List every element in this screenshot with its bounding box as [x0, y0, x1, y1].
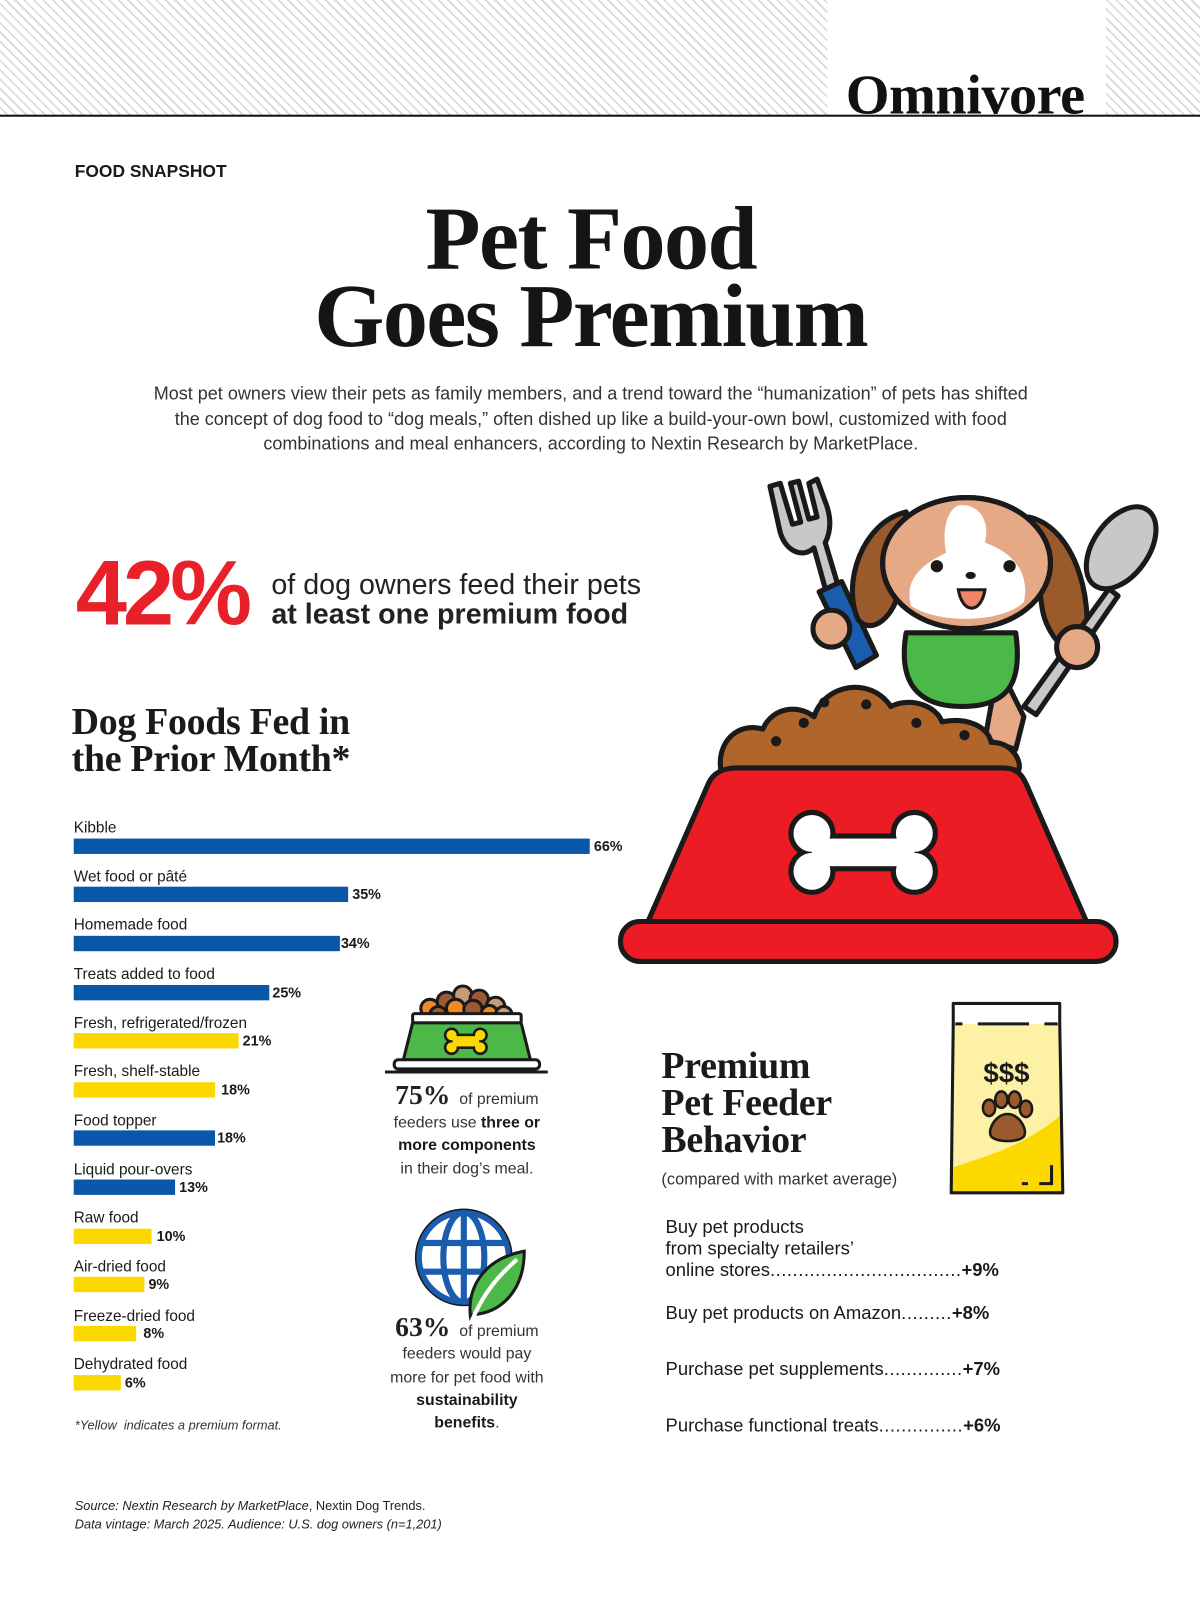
stat: 75% — [394, 1079, 540, 1177]
intro paragraph: the concept of dog food to “dog meals,” often dished up like a build-your-own bowl, customized with food — [175, 408, 1007, 428]
chart heading: Dog Foods Fed in — [72, 701, 350, 743]
source note — [75, 1499, 442, 1531]
icon: globe with leaf — [414, 1208, 526, 1321]
stat: 42%: 42% — [76, 543, 248, 645]
fork — [770, 479, 840, 596]
food mound — [720, 687, 1019, 770]
stat: 63%: benefits. — [434, 1414, 500, 1432]
spoon — [1024, 589, 1118, 715]
bar chart: Dehydrated food — [74, 1356, 187, 1373]
list: behavior items: Buy pet products on Amazon.........+8% — [666, 1302, 989, 1323]
body — [904, 633, 1017, 706]
bar chart: Freeze-dried food — [74, 1308, 195, 1325]
stat: 63% — [390, 1312, 544, 1432]
footnote: *Yellow indicates a premium format. — [75, 1418, 282, 1432]
illustration: dog with fork and spoon on red bowl — [618, 476, 1158, 964]
heading: premium pet feeder behavior: Premium — [661, 1045, 810, 1087]
header hatch band — [0, 0, 1200, 116]
bar chart: Food topper — [74, 1112, 157, 1129]
stat: 42%: at least one premium food — [271, 598, 628, 630]
bar chart: Wet food or pâté — [74, 868, 187, 886]
bar chart: 13% — [179, 1178, 208, 1195]
back leg — [985, 666, 1024, 749]
list: behavior items: Purchase pet supplements..............+7% — [666, 1359, 1000, 1379]
list: behavior items — [666, 1216, 1001, 1435]
chart heading: the Prior Month* — [72, 738, 350, 780]
bowl base — [620, 922, 1116, 961]
bar chart: Kibble — [74, 819, 116, 837]
list: behavior items: Buy pet products — [666, 1216, 804, 1237]
icon: green food bowl — [385, 984, 548, 1074]
stat: 42%: of dog owners feed their pets — [271, 568, 641, 600]
bowl body — [647, 768, 1087, 924]
bar chart: 8% — [143, 1325, 164, 1341]
bar chart: Air-dried food — [74, 1258, 166, 1276]
bar chart: 9% — [148, 1276, 169, 1292]
bar chart: 6% — [125, 1374, 146, 1390]
source note: Data vintage: March 2025. Audience: U.S. dog owners (n=1,201) — [75, 1517, 442, 1531]
head — [883, 498, 1051, 629]
stat: 63%: more for pet food with — [390, 1369, 544, 1386]
bone — [794, 815, 933, 890]
heading: premium pet feeder behavior: Behavior — [661, 1119, 806, 1161]
bar chart: Homemade food — [74, 916, 187, 934]
bar chart: Fresh, refrigerated/frozen — [74, 1015, 247, 1032]
stat: 75%: 75% of premium — [395, 1079, 539, 1110]
right paw — [1057, 627, 1098, 668]
bar chart: 34% — [341, 935, 370, 951]
stat: 75%: in their dog’s meal. — [400, 1160, 533, 1177]
intro paragraph: combinations and meal enhancers, according to Nextin Research by MarketPlace. — [263, 433, 918, 454]
bar chart: Treats added to food — [74, 966, 215, 983]
bar chart — [74, 819, 623, 1390]
stat: 75%: feeders use three or — [394, 1113, 540, 1131]
icon: premium food bag — [950, 1002, 1064, 1194]
bar chart: 18% — [221, 1081, 250, 1098]
subheading: (compared with market average) — [661, 1171, 897, 1189]
face white patch — [909, 505, 1025, 619]
header white box — [827, 0, 1106, 116]
bar chart: 35% — [352, 886, 381, 902]
bar chart: Raw food — [74, 1209, 139, 1227]
stat: 63%: sustainability — [416, 1391, 518, 1409]
heading: premium pet feeder behavior: Pet Feeder — [661, 1082, 832, 1124]
stat: 42% — [76, 543, 641, 645]
bar chart: Fresh, shelf-stable — [74, 1063, 200, 1080]
bar chart: 18% — [217, 1129, 246, 1146]
ears — [852, 512, 906, 626]
bar chart: 10% — [157, 1228, 185, 1244]
heading: premium pet feeder behavior — [661, 1045, 832, 1161]
source note: Source: Nextin Research by MarketPlace, Nextin Dog Trends. — [75, 1499, 425, 1513]
stat: 75%: more components — [398, 1137, 536, 1154]
section label: FOOD SNAPSHOT — [75, 162, 227, 181]
title — [314, 189, 868, 367]
list: behavior items: Purchase functional treats...............+6% — [666, 1415, 1001, 1435]
list: behavior items: from specialty retailers’ — [666, 1238, 854, 1258]
list: behavior items: online stores..................................+9% — [666, 1259, 999, 1280]
stat: 63%: 63% of premium — [395, 1312, 539, 1342]
stat: 63%: feeders would pay — [402, 1346, 531, 1363]
bar chart: Liquid pour-overs — [74, 1161, 192, 1178]
chart heading — [72, 701, 350, 780]
left paw — [813, 610, 850, 647]
title: Goes Premium — [314, 267, 867, 367]
title: Pet Food — [426, 189, 756, 289]
intro paragraph — [154, 383, 1028, 454]
bar chart: 21% — [243, 1032, 271, 1048]
intro paragraph: Most pet owners view their pets as family members, and a trend toward the “humanization” of pets has shifted — [154, 383, 1028, 403]
bar chart: 66% — [594, 838, 623, 854]
icon: premium food bag: $$$ — [983, 1057, 1030, 1088]
bar chart: 25% — [272, 984, 301, 1000]
brand: Omnivore: Omnivore — [846, 63, 1085, 126]
